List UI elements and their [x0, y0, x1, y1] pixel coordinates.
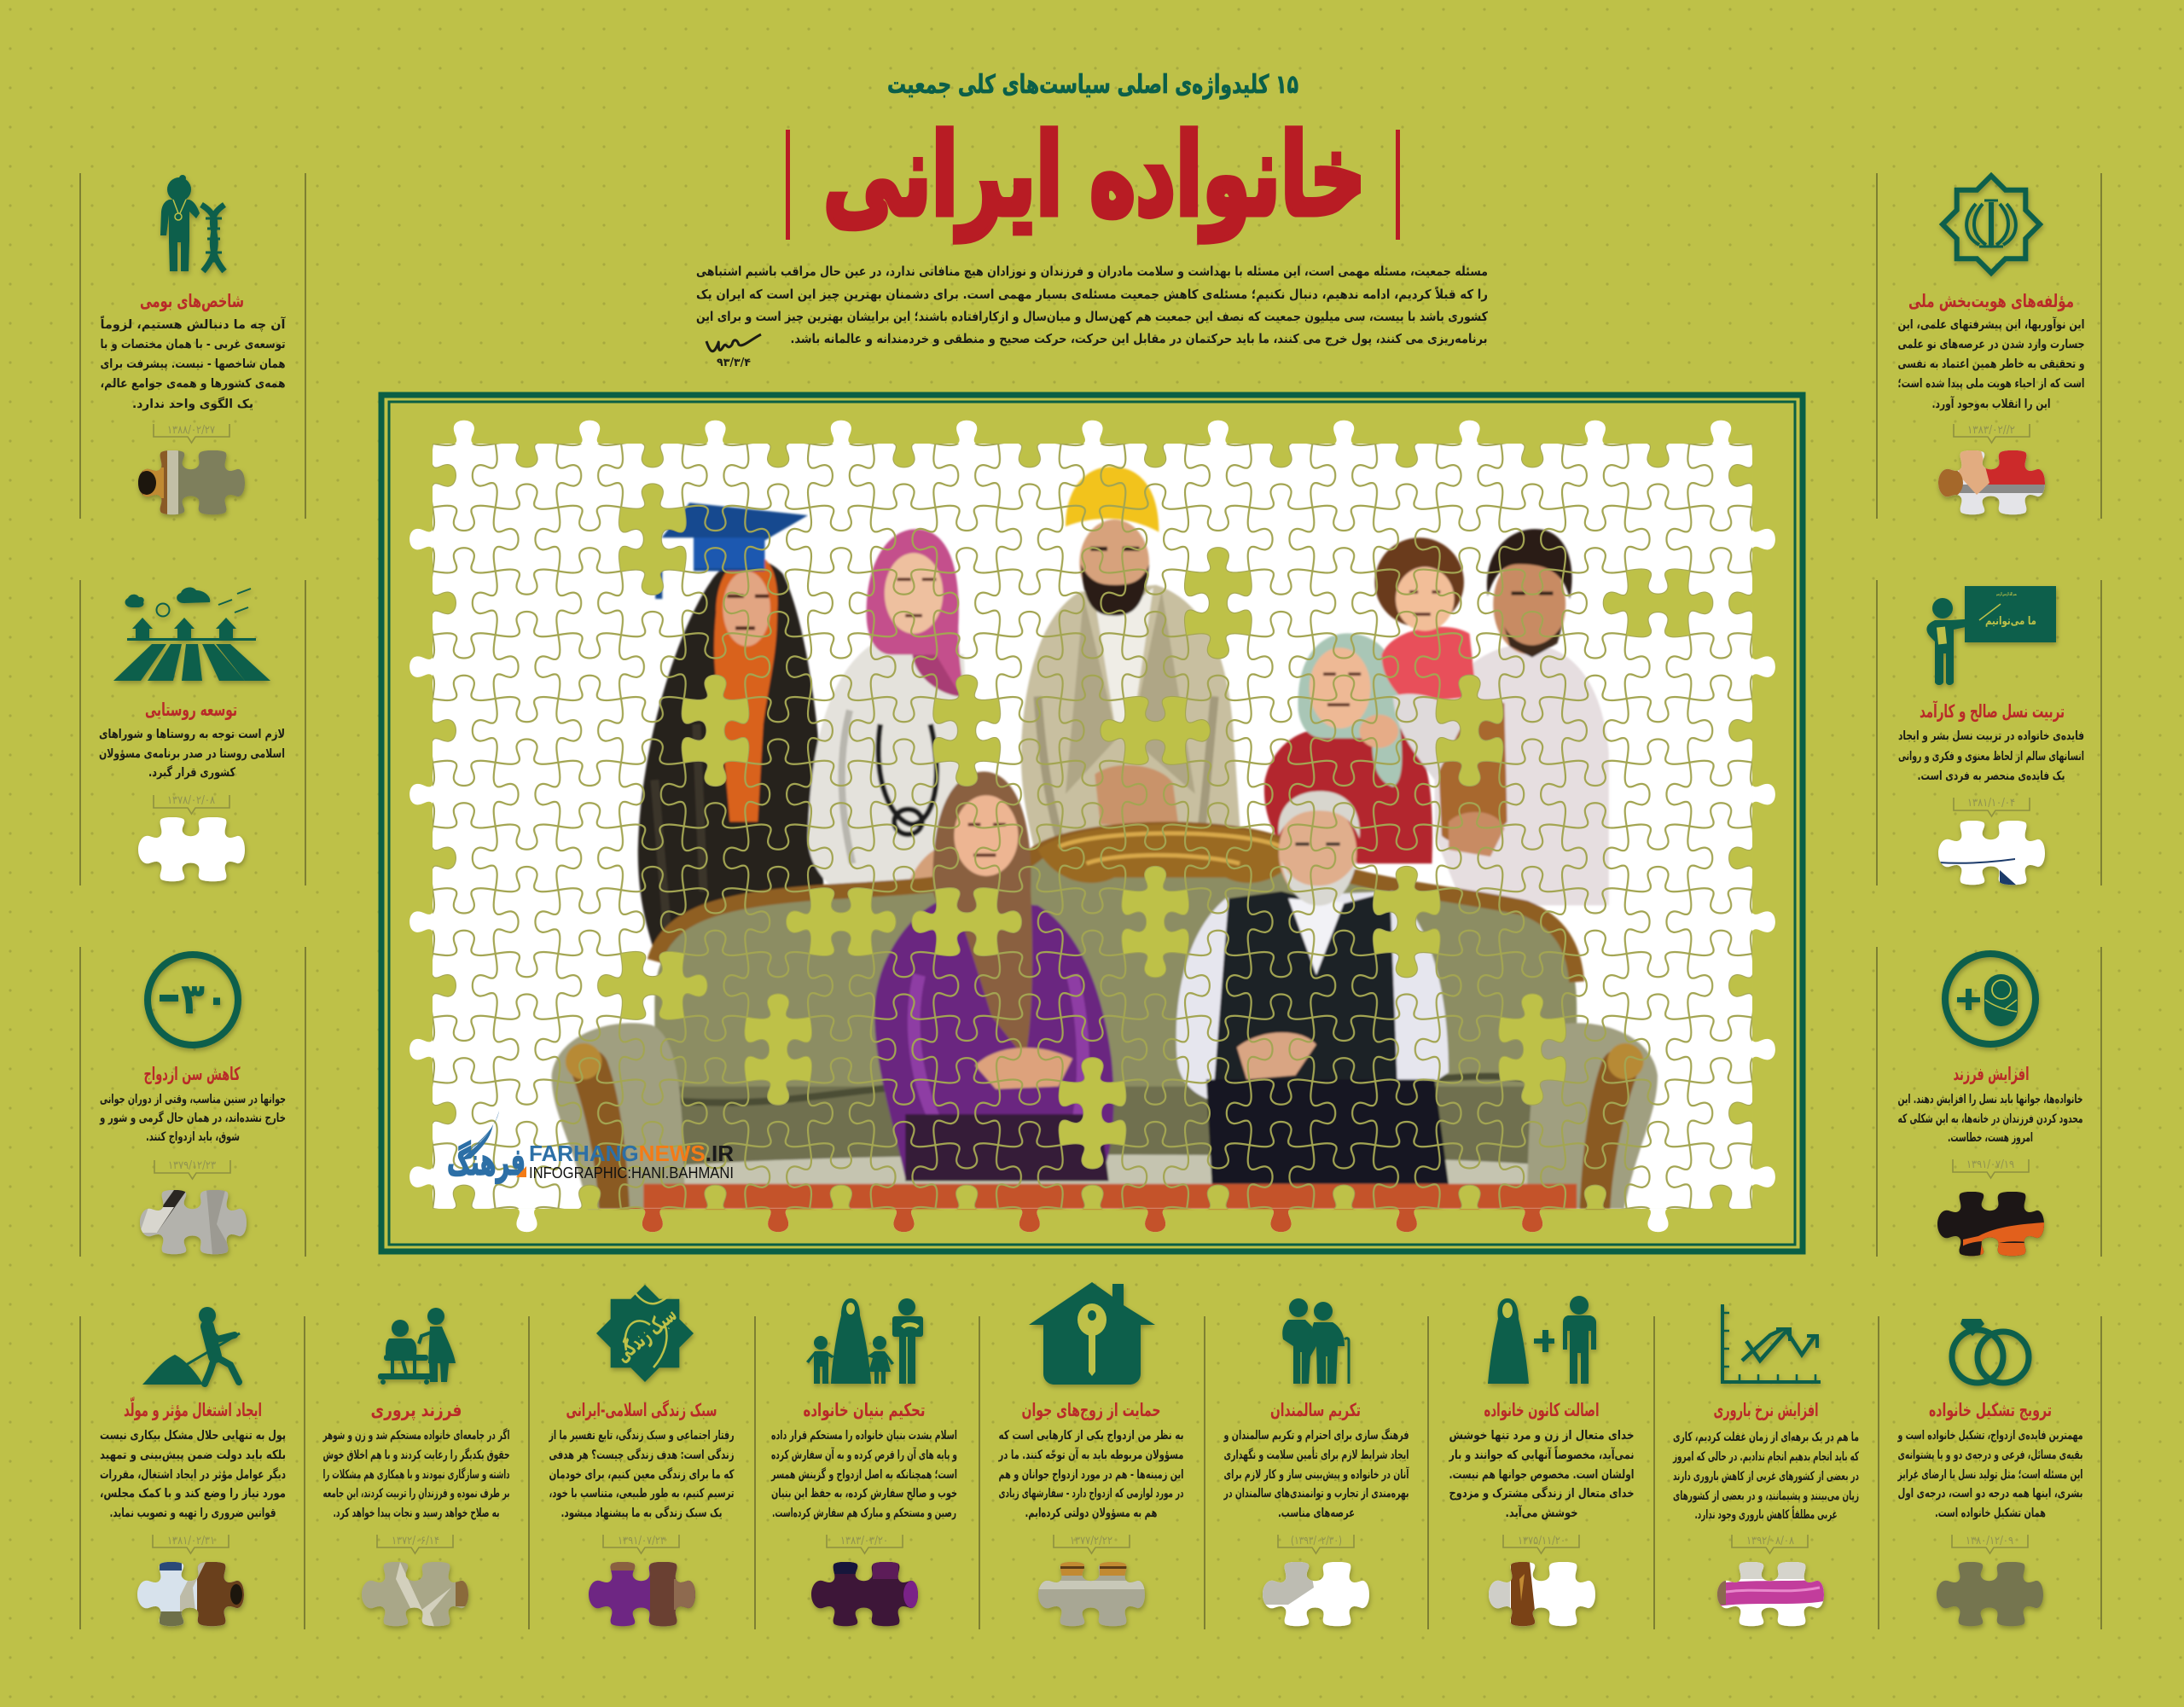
heading: تربیت نسل صالح و کارآمد — [1920, 700, 2065, 722]
intro quote text — [696, 264, 1488, 347]
puzzle piece — [1489, 1562, 1595, 1627]
puzzle piece — [811, 1562, 921, 1627]
heading: توسعه روستایی — [145, 700, 237, 720]
date tag: ۱۳۸۱/۰۲/۳۱ — [167, 1535, 215, 1547]
puzzle piece — [1937, 1562, 2043, 1627]
text block: فرهنگ سازی برای احترام و تکریم سالمندان و — [1223, 1427, 1409, 1443]
text block: به صلاح خواهد رسید و نجات پیدا خواهد کرد. — [333, 1507, 500, 1520]
icon: rising chart — [1722, 1304, 1821, 1382]
text block — [99, 728, 285, 780]
icon: calligraphy star — [596, 1285, 694, 1382]
person: doctor woman in pink scarf — [808, 529, 975, 891]
text block: کشوری قرار گیرد. — [148, 764, 235, 780]
puzzle piece — [589, 1562, 695, 1627]
heading: کاهش سن ازدواج — [143, 1064, 241, 1085]
icon: farm and houses — [113, 587, 270, 681]
text block: شوق، باید ازدواج کنند. — [146, 1130, 240, 1144]
heading: ترویج تشکیل خانواده — [1929, 1400, 2052, 1420]
text block: لازم است توجه به روستاها و شوراهای — [99, 728, 285, 741]
text block: این زمینه‌ها - هم در مورد ازدواج جوانان و هم — [998, 1468, 1184, 1482]
text block: خوشش می‌آید. — [1505, 1505, 1578, 1520]
heading: سبک زندگی اسلامی-ایرانی — [566, 1399, 717, 1420]
puzzle piece — [137, 450, 245, 515]
text block: است که از احیاء هویت ملی پیدا شده است؛ — [1897, 377, 2085, 391]
heading: فرزند پروری — [370, 1400, 462, 1420]
text block: اسلامی روستا در صدر برنامه‌ی مسؤولان — [99, 747, 285, 761]
text block: فایده‌ی خانواده در تربیت نسل بشر و ایجاد — [1898, 729, 2084, 743]
date tag — [1054, 1535, 1130, 1553]
puzzle piece — [140, 1190, 247, 1255]
date tag — [1954, 424, 2030, 443]
date tag — [153, 1535, 229, 1553]
panel: rural development — [99, 587, 285, 882]
icon: minus thirty circle — [148, 955, 238, 1045]
panel: lower marriage age — [99, 955, 286, 1255]
icon: two rings — [1952, 1319, 2029, 1383]
date tag: ۱۳۷۹/۱۲/۲۳ — [168, 1159, 216, 1172]
icon: teacher at board — [1926, 586, 2056, 685]
text block — [998, 1429, 1184, 1520]
text block: به نظر من ازدواج یکی از کارهایی است که — [998, 1429, 1184, 1443]
panel: family authenticity — [1449, 1296, 1635, 1627]
text block: زندگی است: هدف زندگی چیست؟ هر هدفی — [549, 1447, 734, 1462]
date tag: ۱۳۸۳/۰۲//۲ — [1967, 424, 2015, 437]
jigsaw white base — [410, 421, 1775, 1232]
puzzle piece — [1263, 1562, 1369, 1627]
panel: raising fertility rate — [1672, 1304, 1859, 1627]
text block: بشری، اینها همه درجه دو است، درجه‌ی اول — [1897, 1487, 2083, 1501]
text block: خانواده‌ها، جوانها باید نسل را افزایش دهند. این — [1897, 1093, 2083, 1106]
date tag: ۱۳۷۷/۲/۲۲ — [1070, 1535, 1112, 1547]
heading: اصالت کانون خانواده — [1484, 1400, 1599, 1420]
text block — [100, 316, 287, 411]
icon: woman plus man — [1488, 1296, 1596, 1384]
jigsaw seams and missing pieces — [431, 442, 1754, 1232]
text block: اگر در جامعه‌ای خانواده مستحکم شد و زن و شوهر — [322, 1427, 510, 1443]
text block: جوانها در سنین مناسب، وقتی از دوران جوانی — [100, 1093, 286, 1106]
heading: افزایش فرزند — [1954, 1064, 2029, 1084]
icon: elderly couple — [1282, 1298, 1349, 1384]
sofa — [552, 825, 1658, 1209]
logo: farhangnews: FARHANGNEWS.IR — [529, 1141, 734, 1166]
icon: emblem in star — [1943, 176, 2040, 273]
text block — [100, 1429, 286, 1520]
panel: employment — [100, 1307, 286, 1627]
text block: و پایه های آن را قرص کرده و به آن سفارش کرده — [771, 1447, 957, 1462]
date tag — [1954, 797, 2030, 816]
text block: خدای متعال از زن و مرد تنها خوشش — [1449, 1429, 1635, 1443]
text block: همه‌ی کشورها و همه‌ی جوامع عالم، — [101, 377, 285, 391]
seams — [433, 444, 1752, 1209]
text block: در بعضی از کشورهای غربی از کاهش باروری دارند — [1673, 1470, 1859, 1483]
icon: doctor with dna — [160, 175, 224, 271]
text block: دیگر عوامل مؤثر در ایجاد اشتغال، مقررات — [100, 1466, 286, 1482]
text block — [1449, 1429, 1635, 1520]
orange rug tabs — [621, 1207, 1564, 1232]
icon: calligraphy star: سبک زندگی — [610, 1301, 682, 1367]
icon: worker with shovel — [142, 1307, 240, 1385]
person: engineer in yellow hard hat — [1021, 467, 1242, 863]
date tag: ۱۳۸۸/۰۲/۲۷ — [167, 424, 215, 437]
date tag: ۱۳۹۱/۰۷/۲۳ — [618, 1535, 665, 1547]
puzzle piece — [137, 1562, 244, 1627]
text block — [1897, 1429, 2083, 1520]
date tag — [154, 424, 229, 443]
text block: بلکه باید دولت ضمن پیش‌بینی و تمهید — [100, 1449, 286, 1462]
date tag — [1732, 1535, 1808, 1553]
text block: عرصه‌های مناسب. — [1278, 1507, 1355, 1520]
panel: honoring the elderly — [1223, 1298, 1409, 1627]
date tag: ۱۳۸۳/۰۳/۲۰ — [840, 1535, 888, 1547]
subtitle: ۱۵ کلیدواژه‌ی اصلی سیاست‌های کلی جمعیت — [887, 70, 1298, 100]
date tag — [377, 1535, 453, 1553]
text block — [1223, 1427, 1409, 1520]
date tag: ۱۳۸۱/۱۰/۰۴ — [1967, 797, 2015, 810]
logo: farhangnews: فرهنگ — [447, 1141, 526, 1184]
person: seated woman in purple — [874, 772, 1113, 1182]
puzzle piece — [1038, 1562, 1145, 1627]
text block: مسؤولان مربوطه باید به آن توجّه کنند. ما در — [998, 1447, 1184, 1462]
date tag: ۱۳۹۲/۰۸/۰۸ — [1746, 1535, 1794, 1547]
family illustration — [552, 467, 1658, 1209]
text block: و تحقیقی به خاطر همین اعتماد به نفسی — [1897, 357, 2085, 371]
text block: بقیه‌ی مسائل، فرعی و درجه‌ی دو و یا پشتوانه‌ی — [1897, 1449, 2083, 1462]
heading: حمایت از زوج‌های جوان — [1022, 1400, 1160, 1421]
text block — [99, 1093, 286, 1144]
icon: adult with child in walker — [378, 1308, 456, 1385]
text block: پول به تنهایی حلال مشکل بیکاری نیست — [100, 1429, 286, 1443]
date tag — [154, 1159, 230, 1179]
signature — [706, 334, 761, 369]
intro quote text: را که قبلاً کردیم، ادامه ندهیم، دنبال نکنیم؛ مسئله‌ی کاهش جمعیت مسئله‌ی بسیار مهمی است. برای دشمنان بهترین چیز این است که ایران یک — [696, 286, 1488, 303]
text block: خوب و صالح سفارش کرده، به حفظ این بنیان — [771, 1487, 957, 1501]
date tag: ۱۳۷۵/۱۱/۲۰ — [1518, 1535, 1565, 1547]
person: father holding child — [1374, 529, 1609, 905]
text block — [1897, 316, 2085, 411]
text block — [1897, 1093, 2083, 1145]
text block: داشته و سازگاری نمودند و با همکاری هم مشکلات را — [322, 1466, 510, 1482]
heading: تکریم سالمندان — [1270, 1400, 1361, 1420]
text block: رصین و مستحکم و مبارک هم سفارش کرده‌است. — [772, 1507, 956, 1520]
puzzle piece — [1934, 450, 2045, 515]
text block: مهمترین فایده‌ی ازدواج، تشکیل خانواده است و — [1897, 1429, 2083, 1443]
icon: family silhouette — [806, 1298, 923, 1384]
text block: انسانهای سالم از لحاظ معنوی و فکری و روانی — [1898, 750, 2084, 764]
icon: teacher at board: ما می‌توانیم — [1985, 615, 2036, 628]
heading: مؤلفه‌های هویت‌بخش ملی — [1908, 291, 2074, 311]
date tag: ۱۳۷۲/۰۶/۱۴ — [392, 1535, 439, 1547]
text block: نمی‌آید، مخصوصاً آنهایی که جوانند و بار — [1449, 1446, 1635, 1462]
text block: هم به مسؤولان دولتی کرده‌ایم. — [1025, 1507, 1157, 1520]
title: خانواده ایرانی — [823, 110, 1366, 242]
text block: اسلام بشدت بنیان خانواده را مستحکم قرار داده — [771, 1429, 957, 1443]
text block: ترسیم کنیم، به طور طبیعی، متناسب با خود، — [549, 1487, 734, 1501]
intro quote text: کشوری باشد با بیست، سی میلیون جمعیت که نصف این جمعیت هم کهن‌سال و میان‌سال و ازکارافتاده باشند؛ این برایشان بهترین چیز است و برای این — [696, 309, 1488, 325]
text block: محدود کردن فرزندان در خانه‌ها، به این شکلی که — [1897, 1112, 2083, 1126]
text block: زیان می‌بینند و پشیمانند، و در بعضی از کشورهای — [1673, 1489, 1859, 1503]
text block: غربی مطلقاً کاهش باروری وجود ندارد. — [1694, 1506, 1838, 1522]
text block: آنان در خانواده و پیش‌بینی ساز و کار لازم برای — [1223, 1466, 1409, 1482]
logo: farhangnews: INFOGRAPHIC:HANI.BAHMANI — [529, 1164, 734, 1182]
panel: more children — [1897, 954, 2083, 1257]
text block — [549, 1427, 735, 1520]
text block: یک فایده‌ی منحصر به فردی است. — [1918, 769, 2065, 783]
text block: ایجاد شرایط لازم برای تأمین سلامت و نگهداری — [1223, 1447, 1409, 1462]
date tag — [1953, 1158, 2029, 1178]
text block — [770, 1429, 957, 1520]
text block: اولشان است. مخصوص جوانها هم نیست. — [1449, 1468, 1635, 1482]
person: student in chador with graduation cap — [638, 502, 825, 961]
signature: ۹۳/۳/۴ — [717, 357, 751, 369]
text block: رفتار اجتماعی و سبک زندگی، تابع تفسیر ما از — [549, 1427, 734, 1443]
text block: آن چه ما دنبالش هستیم، لزوماً — [100, 316, 287, 332]
icon: teacher at board: بسم الله الرحمن الرحیم — [1996, 592, 2017, 597]
text block — [322, 1427, 510, 1520]
text block: همان تشکیل خانواده است. — [1935, 1507, 2046, 1520]
date tag — [154, 794, 229, 814]
text block: بهره‌مندی از تجارب و توانمندی‌های سالمندان در — [1223, 1487, 1409, 1501]
text block: این مسئله است؛ مثل تولید نسل یا ارضای غرایز — [1897, 1468, 2083, 1482]
panel: support young couples — [998, 1282, 1184, 1627]
panel: child rearing — [322, 1308, 510, 1627]
intro quote text: مسئله جمعیت، مسئله مهمی است، این مسئله با بهداشت و سلامت مادران و فرزندان و نوزادان هیچ منافاتی ندارد، در عین حال مراقب باشیم اشتباهی — [696, 264, 1488, 279]
logo: farhangnews — [447, 1111, 734, 1184]
date tag — [827, 1535, 903, 1553]
text block: جسارت وارد شدن در عرصه‌های نو علمی — [1897, 338, 2085, 351]
puzzle piece — [1717, 1562, 1824, 1627]
icon: house with key — [1029, 1282, 1155, 1385]
heading: تحکیم بنیان خانواده — [804, 1400, 925, 1420]
text block: که ما برای زندگی معین کنیم، برای خودمان — [549, 1466, 735, 1482]
icon: baby plus circle — [1945, 954, 2036, 1044]
panel: islamic iranian lifestyle — [549, 1285, 735, 1627]
puzzle piece — [1937, 1192, 2044, 1257]
puzzle piece — [1938, 821, 2045, 885]
date tag: ۱۳۹۱/۰۷/۱۹ — [1966, 1158, 2014, 1171]
date tag — [1503, 1535, 1579, 1553]
date tag — [1952, 1535, 2028, 1553]
date tag: ۱۳۸۰/۱۲/۰۹ — [1966, 1535, 2013, 1547]
heading: ایجاد اشتغال مؤثر و مولّد — [124, 1396, 262, 1420]
text block: خدای متعال از زندگی مشترک و مزدوج — [1449, 1485, 1635, 1501]
puzzle piece — [138, 817, 245, 882]
text block: حقوق یکدیگر را رعایت کردند و با هم اخلاق خوش — [322, 1447, 510, 1462]
text block: توسعه‌ی غربی - با همان مختصات و با — [101, 338, 285, 351]
heading: افزایش نرخ باروری — [1713, 1400, 1819, 1420]
text block: قوانین ضروری را تهیه و تصویب نماید. — [109, 1507, 276, 1520]
date tag — [1278, 1535, 1354, 1553]
panel: strengthening the family — [770, 1298, 957, 1627]
text block: این را انقلاب به‌وجود آورد. — [1931, 396, 2051, 411]
panel: raising a capable generation — [1898, 586, 2084, 885]
panel frame — [381, 395, 1803, 1251]
date tag: ۱۳۷۸/۰۲/۰۸ — [167, 794, 215, 807]
intro quote text: برنامه‌ریزی می کنند، پول خرج می کنند، ما باید حرکتمان در مقابل این حرکت، حرکت صحیح و منطقی و خردمندانه و عالمانه باشد. — [790, 331, 1488, 347]
person: grandfather with white beard — [1176, 791, 1449, 1184]
missing puzzle holes — [598, 484, 1712, 1168]
panel: promoting family formation — [1897, 1319, 2083, 1627]
date tag: (۱۳۹۳/۰۲/۳۰) — [1291, 1535, 1342, 1547]
text block: که باید انجام بدهیم انجام ندادیم. در حالی که امروز — [1672, 1450, 1859, 1464]
text block: بر طرف نموده و فرزندان را تربیت کردند، این جامعه — [322, 1487, 510, 1501]
text block: خارج نشده‌اند، در همان حال گرمی و شور و — [99, 1110, 286, 1125]
text block: در مورد لوازمی که ازدواج دارد - سفارشهای زیادی — [998, 1487, 1184, 1501]
date tag — [603, 1535, 679, 1553]
text block: این نوآوریها، این پیشرفتهای علمی، این — [1897, 316, 2085, 332]
text block: است؛ همچنانکه به اصل ازدواج و گزینش همسر — [770, 1466, 957, 1482]
text block: امروز هست، خطاست. — [1948, 1131, 2033, 1145]
text block: یک سبک زندگی به ما پیشنهاد میشود. — [561, 1505, 722, 1520]
panel: national identity — [1897, 176, 2085, 515]
text block — [1672, 1431, 1859, 1522]
panel: native indicators — [100, 175, 287, 515]
text block: همان شاخصها - نیست. پیشرفت برای — [101, 357, 285, 371]
person: woman in teal scarf and red sweater — [1264, 633, 1432, 863]
title — [786, 110, 1400, 242]
text block — [1898, 729, 2084, 783]
heading: شاخص‌های بومی — [140, 291, 244, 311]
text block: مورد نیاز را وضع کند و با کمک مجلس، — [100, 1487, 286, 1501]
text block: یک الگوی واحد ندارد. — [132, 396, 253, 411]
text block: ما هم در یک برهه‌ای از زمان غفلت کردیم، کاری — [1673, 1431, 1859, 1444]
outer notches — [431, 442, 1754, 1211]
puzzle piece — [362, 1562, 468, 1627]
icon: minus thirty circle: ۳۰ — [181, 974, 229, 1024]
